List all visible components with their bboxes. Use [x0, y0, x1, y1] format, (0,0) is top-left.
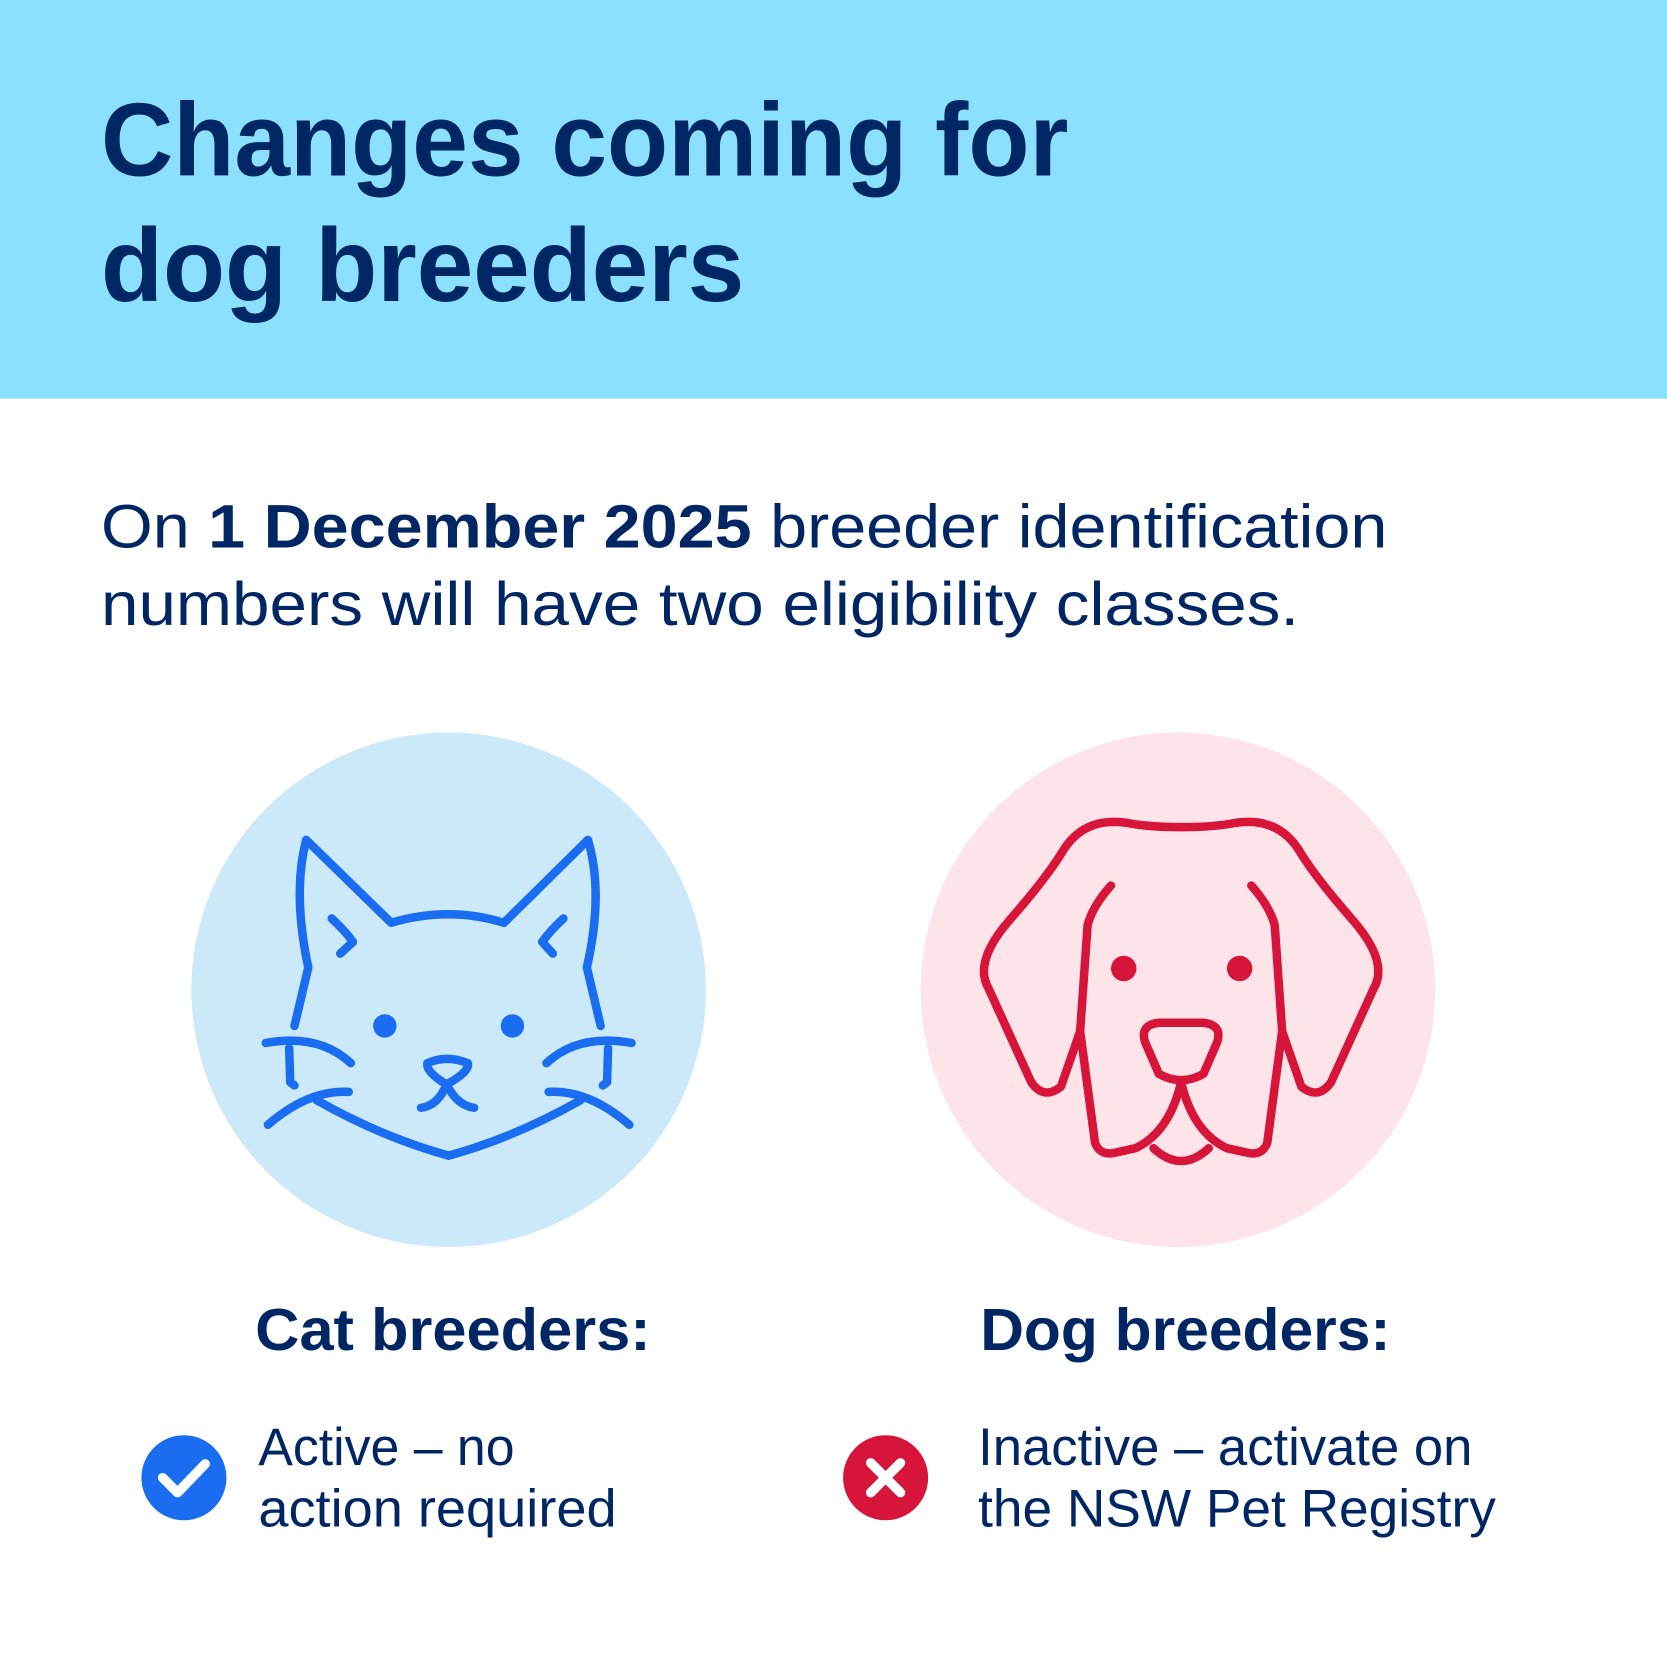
text: cat status: Active – no: [258, 1418, 515, 1477]
panel: cat breeders: [141, 733, 706, 1539]
intro text: numbers will have two eligibility classes.: [101, 570, 1299, 639]
icon: check: [141, 1435, 226, 1520]
icon: cross: [843, 1435, 928, 1520]
icon: dog: [921, 733, 1435, 1247]
title: [101, 82, 1068, 324]
text: dog status: Inactive – activate on: [978, 1418, 1472, 1477]
heading: dog breeders: Dog breeders:: [980, 1296, 1391, 1363]
text: cat status: action required: [258, 1480, 617, 1539]
header band: [0, 0, 1667, 399]
icon: cat: [191, 733, 706, 1247]
panel: dog breeders: [843, 733, 1496, 1539]
text: dog status: the NSW Pet Registry: [978, 1480, 1496, 1539]
title: dog breeders: [101, 208, 744, 324]
text: cat status: [258, 1418, 617, 1539]
intro text: [101, 493, 1387, 639]
text: dog status: [978, 1418, 1496, 1539]
intro text: On 1 December 2025 breeder identification: [101, 493, 1387, 562]
title: Changes coming for: [101, 82, 1068, 198]
heading: cat breeders: Cat breeders:: [255, 1296, 651, 1363]
